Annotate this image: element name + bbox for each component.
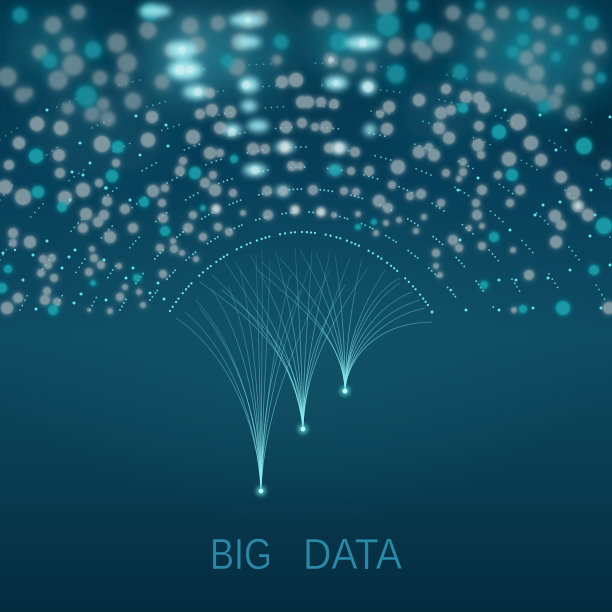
- lower grey particles: [0, 73, 612, 314]
- upper teal blurred particles: [13, 0, 606, 113]
- innermost arc: [170, 232, 432, 311]
- bright white highlights: [175, 17, 581, 215]
- title: [210, 530, 403, 579]
- bright cluster glows: [139, 5, 381, 195]
- title: BIG: [210, 530, 272, 579]
- soft glow haze behind particle field: [0, 0, 612, 175]
- small cyan particles: [2, 108, 612, 314]
- fibre fan: centre node: [200, 248, 368, 428]
- source node: centre: [298, 424, 308, 434]
- source node: left: [256, 486, 266, 496]
- lower teal particles: [0, 103, 612, 315]
- fibre fan: right node: [255, 250, 432, 390]
- source node: right: [340, 386, 350, 396]
- title: DATA: [303, 530, 403, 579]
- dotted arcs of particles: [0, 63, 612, 311]
- upper blurred particles: [0, 0, 606, 126]
- fibre fan: left node: [176, 250, 330, 490]
- data fibres from source nodes: [176, 248, 432, 490]
